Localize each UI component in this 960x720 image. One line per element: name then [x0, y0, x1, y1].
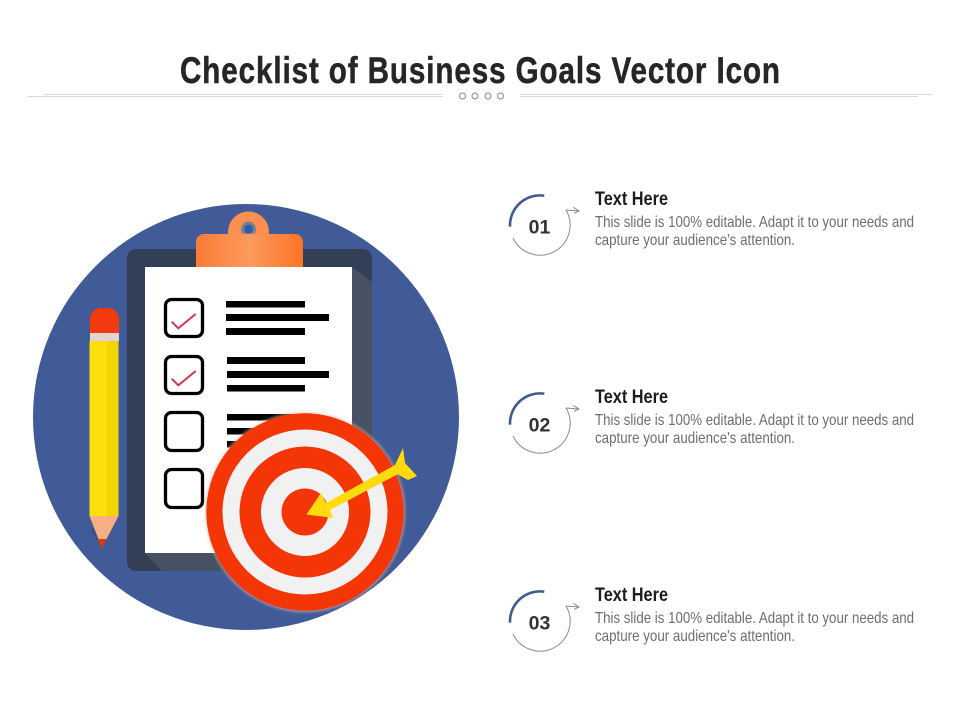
- pencil: [90, 308, 119, 548]
- heading 03: Text Here: [595, 585, 668, 606]
- item 02: [510, 387, 914, 453]
- description 03: [595, 610, 914, 645]
- progress ring 02: [510, 393, 579, 453]
- clipboard clip: [196, 212, 303, 267]
- description 03: capture your audience's attention.: [595, 628, 795, 645]
- number 02: 02: [529, 414, 550, 436]
- checklist item 4: [166, 470, 202, 508]
- item 01: [510, 189, 914, 255]
- description 01: [595, 214, 914, 249]
- item 03: [510, 585, 914, 651]
- checklist item 3: [166, 412, 305, 450]
- description 02: [595, 412, 914, 447]
- heading 02: Text Here: [595, 387, 668, 408]
- checklist item 2: [166, 356, 329, 394]
- progress ring 01: [510, 195, 579, 255]
- arrow: [306, 465, 398, 518]
- number 03: 03: [529, 612, 550, 634]
- paper sheet: [145, 267, 352, 553]
- description 02: capture your audience's attention.: [595, 430, 795, 447]
- title divider: [28, 93, 933, 99]
- arrow fletching: [395, 448, 417, 480]
- clipboard board: [127, 249, 372, 571]
- target: [205, 412, 405, 612]
- heading 01: Text Here: [595, 189, 668, 210]
- background circle: [33, 204, 459, 630]
- description 01: capture your audience's attention.: [595, 232, 795, 249]
- title: Checklist of Business Goals Vector Icon: [180, 51, 780, 92]
- progress ring 03: [510, 591, 579, 651]
- checklist item 1: [166, 300, 329, 336]
- number 01: 01: [529, 216, 550, 238]
- illustration: checklist and target: [33, 204, 459, 630]
